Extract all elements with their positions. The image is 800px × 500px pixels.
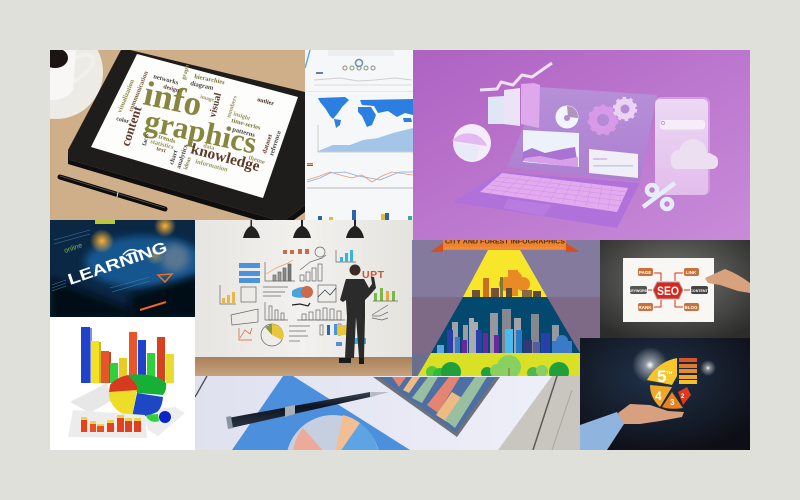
wall charts [220,247,398,346]
SEO label chips: BLOG [684,305,698,310]
word cloud: data [202,143,215,152]
word cloud: networks [152,73,180,87]
photo: pen on chart papers and wood [195,376,580,450]
photo: SEO paper held by hand [600,240,750,338]
collage canvas [50,50,750,450]
word cloud: info [140,74,206,124]
chart segments: 3 [670,398,675,407]
word cloud: graph [181,64,191,81]
word cloud: knowledge [189,140,262,175]
percent symbol [643,183,675,209]
chart segments: 4 [655,389,662,403]
word cloud [115,64,283,175]
word cloud: diagram [190,80,215,92]
pen [60,176,165,209]
word cloud: time-series [230,117,262,132]
paper [623,258,714,322]
area chart [318,125,413,152]
pendant lamps [243,220,364,238]
blue city skyline [437,309,572,353]
paper sheet left [70,383,112,413]
word cloud: graphics [142,103,260,160]
learning label: online [63,242,83,255]
light flare [633,348,666,382]
orange city skyline [472,270,541,297]
illustration: city and forest pyramid [412,238,600,382]
bar chart sheet [373,377,500,437]
top mini chart [314,50,412,85]
red arrows [648,273,690,307]
word cloud: insight [232,111,251,122]
photo: 3D purple laptop illustration [413,50,750,240]
wood floor [195,357,412,376]
chart card [523,130,579,167]
SEO hexagon: SEO [657,284,679,298]
word cloud: patterns [231,126,256,139]
illustration: colourful 3D charts [50,317,195,450]
paper sheet right [142,407,185,436]
word cloud: text [155,146,166,154]
chart segments [647,358,691,409]
chart segments: TH [666,370,672,375]
word cloud: analytics [175,144,190,170]
word cloud: hierarchies [194,73,226,86]
word cloud: image [199,94,215,104]
photo: online learning [50,220,195,317]
line chart [307,163,413,188]
title banner [430,240,580,252]
photo: tablet with infographics word cloud [50,50,305,220]
laptop keyboard [480,173,628,216]
word cloud: numbers [226,95,239,119]
pyramid tiers [463,250,547,297]
illustration: hand holding segmented chart [580,338,750,450]
phone [655,97,710,195]
world map [305,91,413,128]
word cloud: chart [168,149,180,166]
word cloud: ideas [183,156,193,171]
word cloud: reference [268,130,283,157]
3D bar chart [81,327,174,383]
dark paper edge [195,376,207,397]
SEO label chips: CONTENT [690,289,708,293]
UPT label on wall: UPT [362,269,385,281]
word cloud: design [162,84,180,94]
word cloud: information [194,158,229,174]
laptop screen [507,87,657,182]
blue triangle document [232,376,410,450]
bottom bar chart [318,210,412,220]
forest trees [426,355,569,376]
word cloud: statistics [149,138,175,151]
3D bars [488,83,540,128]
laptop base [453,172,640,228]
ballpoint pen [226,392,388,429]
word cloud: theme [247,154,266,166]
SEO label chips [629,268,708,311]
slider card [589,149,638,178]
word cloud: dataset [261,133,274,155]
tablet screen [91,54,298,198]
SEO label chips: RANK [638,305,652,310]
wood table [498,376,580,450]
wifi icon [123,250,139,256]
word cloud: communication [127,70,150,113]
donut chart [556,106,578,128]
cloud [670,139,718,169]
businessman figure [339,264,376,364]
hand and sleeve [580,404,684,450]
screenshot: dashboard charts [305,50,413,220]
gears [589,98,636,134]
word cloud: trends [157,133,177,145]
tablet body [68,48,305,222]
blue edge [305,50,310,68]
word cloud: color [115,116,130,125]
photo: businessman drawing charts on wall [195,220,412,376]
legend strips [679,358,697,384]
chart segments: 2 [681,394,685,400]
floating pie chart [452,124,491,162]
SEO label chips: PAGE [639,270,651,275]
SEO hexagon [653,282,683,299]
SEO label chips: KEYWORD [629,289,648,293]
title banner: CITY AND FOREST INFOGRAPHICS [445,238,566,246]
play triangle [158,274,172,282]
word cloud: facts [142,133,151,146]
word cloud: visual [207,92,224,119]
photo: online learning: LEARNING [66,239,170,289]
pie chart [288,415,378,450]
segment numbers: 5 [657,367,666,386]
saucer and coffee cup [50,50,103,119]
word cloud: visualization [116,78,136,114]
paper with bar chart [68,410,147,438]
SEO label chips: LINK [686,270,697,275]
small donut [146,411,171,423]
word cloud: content [118,104,145,148]
pie chart 3D [109,374,166,417]
word cloud: outlier [256,97,275,107]
line trend arrow [480,63,552,90]
hand [705,269,750,293]
